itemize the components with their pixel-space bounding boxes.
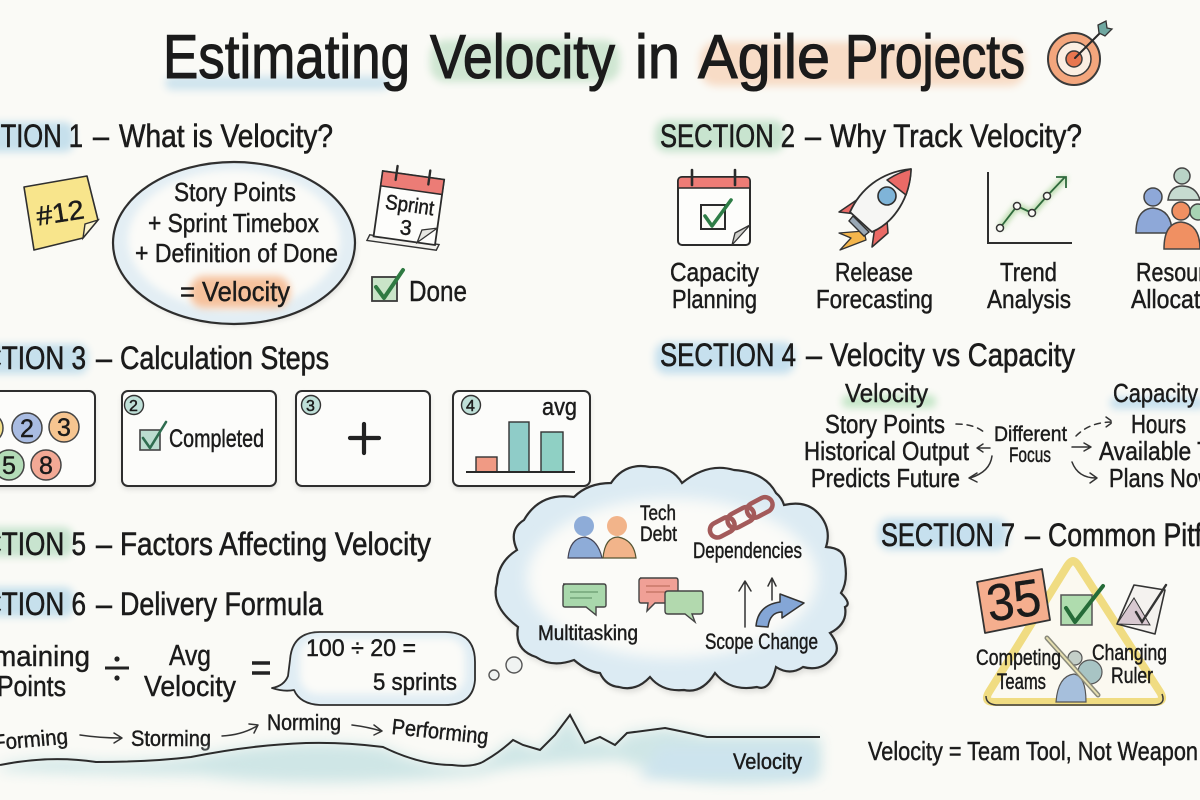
item: resource allocation	[1131, 168, 1200, 314]
factor: dependencies: Dependencies	[693, 538, 802, 563]
definition bubble: = Velocity	[180, 276, 290, 307]
pitfall: competing teams: Teams	[997, 669, 1046, 694]
pitfall: crossed check	[1117, 585, 1166, 634]
heading: section 1: What is Velocity?	[119, 118, 333, 154]
step 1 card: story point balls: 8	[39, 452, 53, 480]
definition bubble: Story Points	[174, 177, 296, 207]
factor: tech debt: Tech	[640, 502, 676, 525]
title: Estimating	[163, 23, 410, 92]
step 1 card: story point balls: 5	[2, 452, 16, 480]
arrows: right	[1072, 417, 1113, 483]
velocity wave chart: Velocity	[733, 749, 802, 774]
definition bubble: + Sprint Timebox	[148, 208, 319, 238]
done checkbox: Done	[409, 276, 467, 308]
factor: scope change	[705, 578, 818, 654]
formula: divide sign	[105, 656, 129, 681]
stage labels with arrows: Performing	[391, 714, 490, 749]
velocity column: Story Points	[825, 409, 945, 439]
panel: team stages and velocity wave	[0, 710, 820, 782]
done checkbox	[372, 270, 467, 308]
icon: sticky note #12	[24, 176, 98, 250]
heading: section 3: –	[96, 340, 112, 376]
heading: section 2: –	[805, 118, 821, 154]
icon: sticky note #12: #12	[34, 194, 86, 232]
title: in	[635, 23, 680, 92]
item: release forecasting	[816, 169, 933, 314]
step 2 card: completed: 2	[129, 398, 138, 415]
item: release forecasting: Release	[835, 257, 913, 287]
warning triangle	[986, 561, 1163, 705]
heading: section 4: Velocity vs Capacity	[830, 337, 1075, 373]
panel: section 4 velocity vs capacity	[655, 337, 1200, 493]
velocity wave chart	[0, 715, 820, 782]
heading: section 7: –	[1025, 517, 1040, 553]
factor: tech debt	[568, 502, 677, 558]
item: trend analysis	[987, 172, 1072, 314]
item: release forecasting: Forecasting	[816, 284, 933, 314]
step 1 card: story point balls: 2	[20, 415, 34, 443]
heading: section 2	[655, 118, 1082, 154]
stage labels with arrows: Norming	[267, 710, 341, 735]
title	[163, 23, 1025, 92]
step 2 card: completed: Completed	[169, 425, 264, 453]
stage labels with arrows	[0, 710, 490, 755]
formula: avg velocity: Velocity	[144, 671, 236, 703]
heading: section 6: –	[96, 586, 112, 622]
icon: rocket	[839, 169, 911, 250]
velocity column	[804, 378, 970, 493]
definition bubble	[113, 162, 356, 325]
step 2 card: completed	[122, 391, 276, 489]
icon: calendar with checkmark	[678, 170, 750, 245]
heading: section 2: Why Track Velocity?	[830, 118, 1082, 154]
speech bubble: result	[272, 632, 475, 705]
heading: section 4	[655, 337, 1075, 374]
heading: section 2: SECTION 2	[660, 118, 795, 154]
heading: section 6: Delivery Formula	[120, 586, 323, 622]
factor: multitasking	[538, 578, 703, 645]
step 4 card: average bar chart	[453, 391, 590, 489]
heading: section 5: Factors Affecting Velocity	[120, 526, 431, 562]
step 3 card: plus: 3	[306, 398, 315, 415]
formula: equals sign	[252, 663, 270, 673]
velocity column: Historical Output	[804, 436, 970, 466]
factor: dependencies	[693, 495, 802, 563]
different focus label	[994, 423, 1067, 467]
item: capacity planning: Capacity	[670, 257, 759, 287]
item: capacity planning: Planning	[672, 284, 757, 314]
panel: section 2 why track velocity	[655, 118, 1200, 314]
panel: section 1 what is velocity	[0, 118, 467, 325]
arrows: left	[956, 424, 992, 482]
icon: wrench over person	[1047, 638, 1102, 702]
formula: remaining points	[0, 641, 90, 703]
heading: section 1: –	[93, 118, 109, 154]
panel: section 5 factors affecting velocity	[0, 466, 850, 695]
panel: section 6 delivery formula	[0, 586, 522, 705]
icon: sprint 3 calendar: Sprint	[384, 191, 436, 220]
speech bubble: result: 5 sprints	[373, 669, 457, 696]
factors cloud	[496, 466, 850, 695]
heading: section 5	[0, 526, 431, 562]
title: Velocity	[430, 23, 615, 92]
heading: section 4: –	[806, 337, 822, 373]
item: capacity planning	[670, 170, 759, 314]
title: Projects	[845, 23, 1025, 92]
icon: sprint 3 calendar: 3	[398, 216, 413, 240]
panel: section 7 common pitfalls	[878, 517, 1200, 705]
heading: section 5: –	[96, 526, 112, 562]
icon: target with dart	[1048, 21, 1112, 85]
speech bubble: result: 100 ÷ 20 =	[306, 635, 416, 662]
different focus label: Focus	[1009, 444, 1051, 467]
definition bubble: + Definition of Done	[135, 238, 338, 268]
icon: line chart	[988, 172, 1072, 243]
stage labels with arrows: Storming	[131, 726, 211, 751]
heading: section 7: SECTION 7	[881, 517, 1015, 553]
pitfall: changing ruler: Ruler	[1111, 663, 1153, 688]
formula: avg velocity	[144, 640, 236, 703]
pitfall: 35 sign: 35	[983, 569, 1045, 633]
capacity column	[1099, 378, 1200, 493]
panel: section 3 calculation steps	[0, 340, 590, 489]
step 1 card: story point balls	[0, 391, 95, 489]
icon: people group	[1136, 168, 1200, 249]
step 4 card: average bar chart: 4	[466, 398, 475, 415]
factor: scope change: Scope Change	[705, 629, 818, 654]
factor: tech debt: Debt	[640, 523, 677, 546]
heading: section 7	[878, 517, 1200, 553]
heading: section 4: SECTION 4	[660, 337, 796, 373]
pitfall: changing ruler: Changing	[1092, 640, 1167, 665]
velocity column: Velocity	[845, 378, 928, 408]
pitfall: competing teams	[976, 645, 1061, 694]
pitfall: changing ruler	[1092, 640, 1167, 688]
step 3 card: plus	[296, 391, 430, 489]
factor: multitasking: Multitasking	[538, 622, 638, 645]
different focus label: Different	[994, 423, 1067, 446]
velocity column: Predicts Future	[811, 463, 960, 493]
item: trend analysis: Trend	[1000, 257, 1057, 287]
heading: section 6	[0, 586, 323, 622]
pitfall: check box	[1061, 586, 1103, 625]
item: trend analysis: Analysis	[987, 284, 1071, 314]
title: Agile	[698, 23, 830, 92]
pitfall: competing teams: Competing	[976, 645, 1061, 670]
heading: section 1	[0, 118, 333, 154]
capacity column: Hours	[1131, 409, 1186, 439]
step 1 card: story point balls: 3	[57, 414, 71, 442]
heading: section 3	[0, 340, 329, 376]
formula: avg velocity: Avg	[169, 640, 211, 672]
thought bubbles	[489, 657, 522, 680]
step 4 card: average bar chart: avg	[542, 394, 577, 421]
icon: sprint 3 calendar	[367, 163, 449, 250]
heading: section 3: Calculation Steps	[120, 340, 329, 376]
